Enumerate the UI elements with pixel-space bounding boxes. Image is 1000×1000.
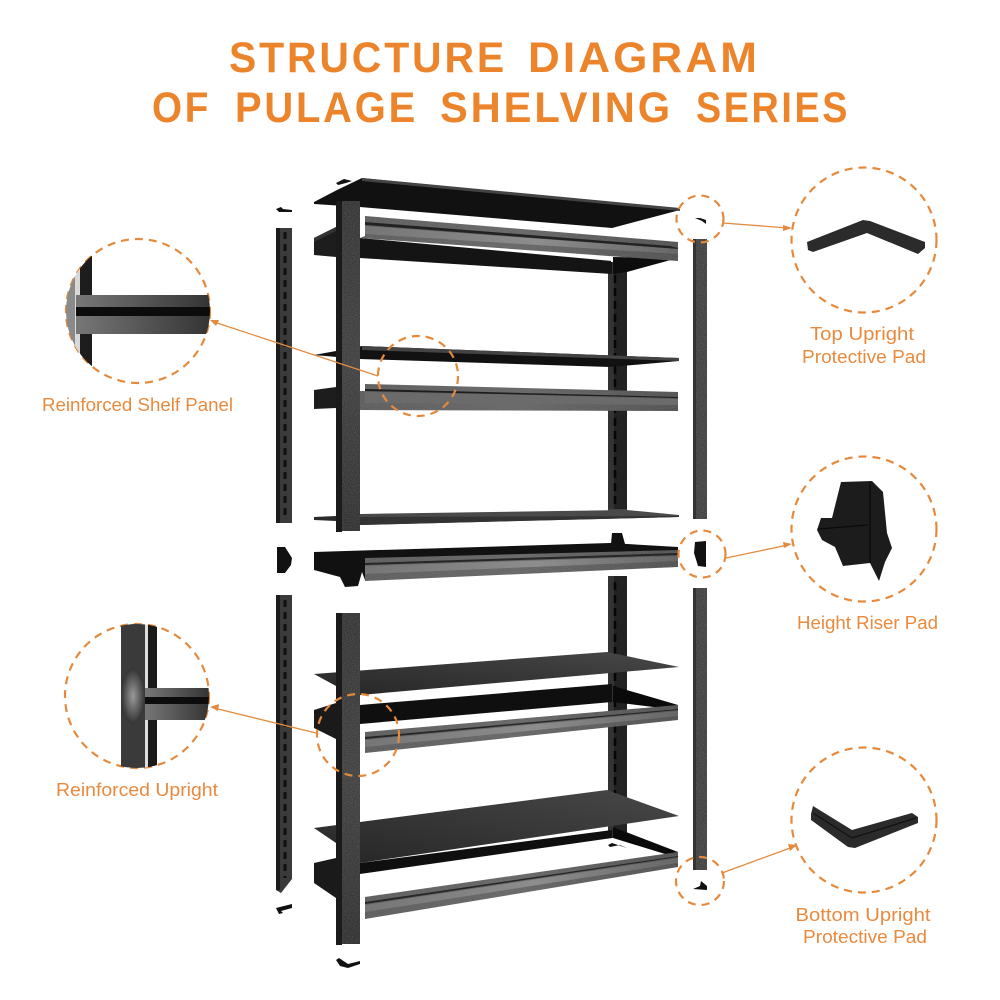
bottom shelf of lower unit [314,790,679,919]
lowest shelf of upper unit [314,510,679,525]
icon: riser pad [817,481,892,581]
label: top upright protective pad: Protective Pad [802,346,926,367]
label: bottom upright protective pad: Bottom Upright [796,904,930,925]
height riser level with beam [314,533,678,587]
second shelf of lower unit [314,652,679,753]
label: bottom upright protective pad [796,904,930,947]
icon: bottom pad [811,806,918,848]
third-level shelf with beam [314,346,679,411]
title: OF [152,84,211,132]
callout: bottom upright protective pad [676,748,936,947]
icon: top pad [807,220,925,254]
callout: height riser pad [678,456,938,633]
label: top upright protective pad [802,323,926,367]
front upright upper [336,201,360,532]
label: reinforced upright: Reinforced Upright [56,779,218,800]
bottom protective pad [336,958,360,968]
rear upright lower [608,576,627,838]
label: height riser pad: Height Riser Pad [797,612,938,633]
rear upright upper [608,262,627,515]
upper shelving unit [314,178,680,532]
second-level shelf with beam [314,216,678,274]
far-right uprights and pads [693,218,707,890]
top pad arrow [723,223,792,231]
bottom pad arrow [722,844,797,873]
detail: shelf panel beam close-up [66,256,210,366]
title: PULAGE [235,84,418,132]
title [152,34,850,132]
title: DIAGRAM [528,34,760,82]
title: SHELVING [440,84,673,132]
upright arrow [210,704,316,733]
far-left uprights and pads [276,207,292,914]
lower shelving unit [314,533,679,968]
callout: top upright protective pad [676,168,936,367]
callout: reinforced upright [56,620,399,800]
callout: reinforced shelf panel [42,239,458,416]
detail: upright close-up [121,620,210,770]
top shelf panel [314,178,680,228]
riser pad arrow [726,542,792,558]
front upright lower [336,613,360,945]
title: STRUCTURE [229,34,507,82]
label: top upright protective pad: Top Upright [810,323,914,344]
shelf panel arrow [210,320,378,376]
label: reinforced shelf panel: Reinforced Shelf Panel [42,394,233,415]
label: bottom upright protective pad: Protective Pad [803,926,927,947]
title: SERIES [696,84,850,132]
